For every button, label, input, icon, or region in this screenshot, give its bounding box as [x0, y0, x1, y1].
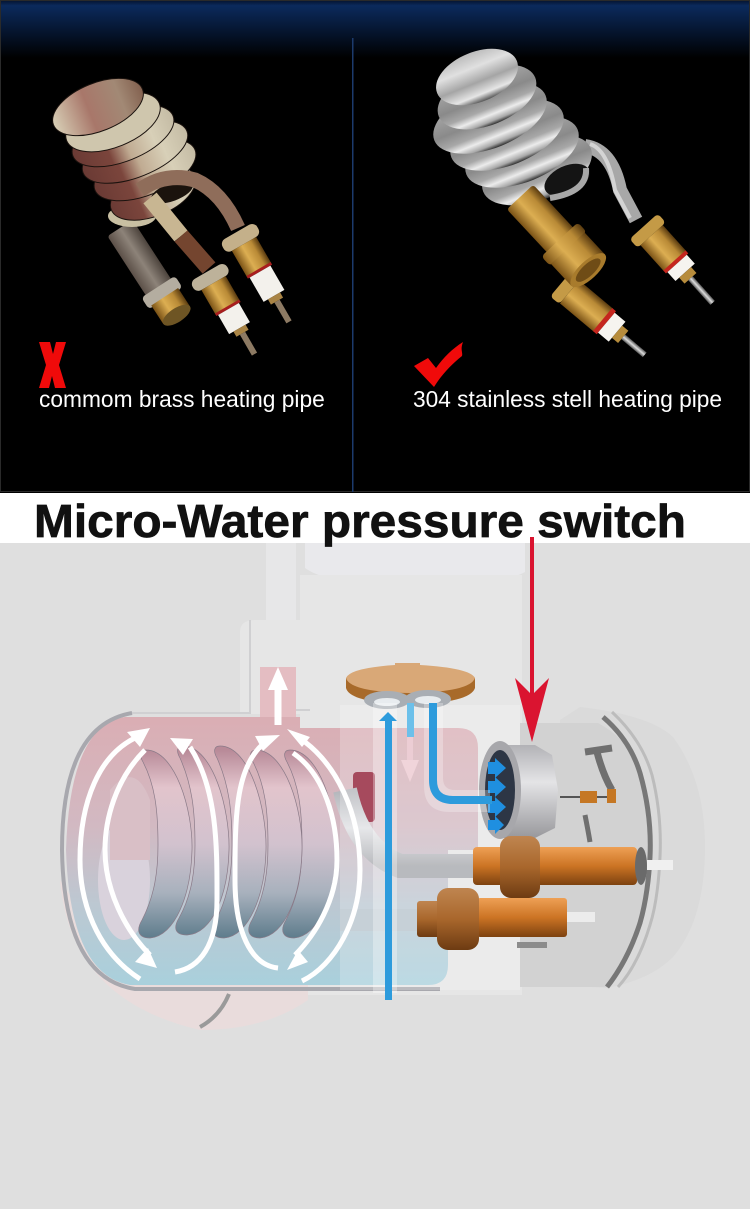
caption: common brass pipe: commom brass heating pipe	[39, 386, 325, 412]
photo: corroded brass heating pipe	[45, 67, 306, 364]
exit tube of coil	[345, 790, 480, 866]
back of heating coil	[98, 777, 150, 940]
brass valve cap	[346, 663, 475, 709]
translucent column overlay	[340, 705, 520, 990]
heading: Micro-Water pressure switch	[34, 495, 686, 547]
photo: stainless steel heating pipe	[423, 38, 727, 367]
water tank	[62, 620, 478, 989]
heating coil rings	[139, 746, 336, 938]
caption: stainless steel pipe: 304 stainless stell heating pipe	[413, 386, 722, 412]
end cap housing	[520, 707, 705, 988]
lower tubes behind column	[340, 909, 420, 931]
icon: red check mark	[414, 342, 463, 387]
icon: red cross	[39, 342, 66, 388]
white flow arrows	[80, 667, 360, 981]
faded heater body	[60, 543, 525, 1030]
blue water flow arrows	[373, 703, 492, 1000]
red arrow to pressure switch	[515, 537, 549, 742]
copper electrodes	[417, 836, 673, 950]
panel: water heater cutaway	[0, 537, 750, 1209]
pressure switch module and contacts	[479, 741, 616, 842]
panel: heating pipe comparison	[0, 0, 750, 493]
panel: white heading band	[0, 493, 750, 543]
